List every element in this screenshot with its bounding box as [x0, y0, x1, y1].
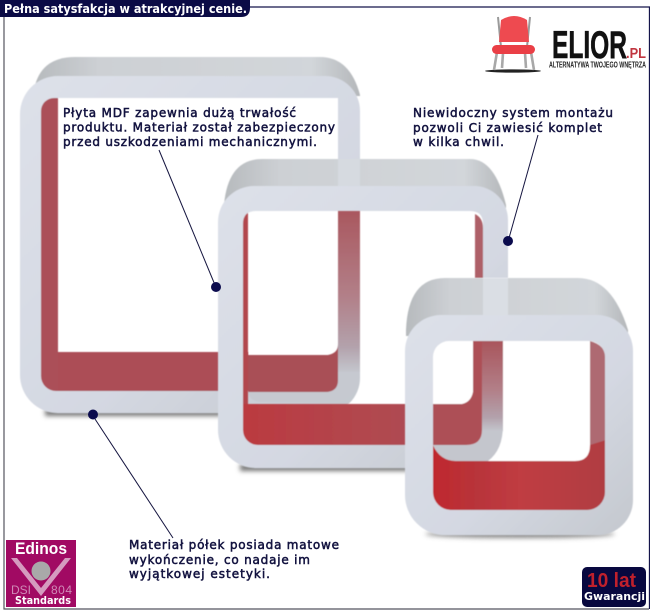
callout: mounting system: w kilka chwil. [413, 135, 504, 149]
header banner: Pełna satysfakcja w atrakcyjnej cenie. [4, 1, 247, 16]
red right band [248, 205, 360, 402]
callout: matte finish: wyjątkowej estetyki. [129, 567, 270, 581]
callout: mounting system: pozwoli Ci zawiesić komplet [413, 121, 602, 135]
badge: Edinos standards: Edinos [15, 540, 67, 558]
badge: Edinos standards: 804 [51, 583, 72, 597]
callout: MDF board: Płyta MDF zapewnia dużą trwałość [63, 106, 296, 120]
badge: 10 year warranty: Gwarancji [584, 591, 645, 603]
opening seen through small cube [433, 341, 605, 463]
callout: mounting system: Niewidoczny system montażu [413, 106, 613, 120]
large shelf cube [20, 57, 360, 416]
badge: 10 year warranty [582, 567, 646, 607]
badge: Edinos standards: Standards [15, 595, 71, 607]
callout: matte finish [88, 410, 339, 581]
callout: MDF board: przed uszkodzeniami mechanicznymi. [63, 135, 317, 149]
icon: red chair [485, 16, 541, 73]
medium shelf cube [218, 159, 508, 471]
logo: Elior: .PL [626, 45, 646, 62]
badge: Edinos standards: DSI [11, 583, 31, 597]
callout: matte finish: Materiał półek posiada matowe [129, 538, 339, 552]
callout: matte finish: wykończenie, co nadaje im [129, 553, 310, 567]
badge: 10 year warranty: 10 lat [587, 570, 636, 592]
small shelf cube [405, 278, 633, 538]
logo: Elior [485, 16, 646, 73]
callout: MDF board: produktu. Materiał został zabezpieczony [63, 120, 335, 134]
callout: mounting system [413, 106, 613, 246]
badge: Edinos standards [6, 540, 76, 607]
callout: MDF board [63, 106, 335, 292]
